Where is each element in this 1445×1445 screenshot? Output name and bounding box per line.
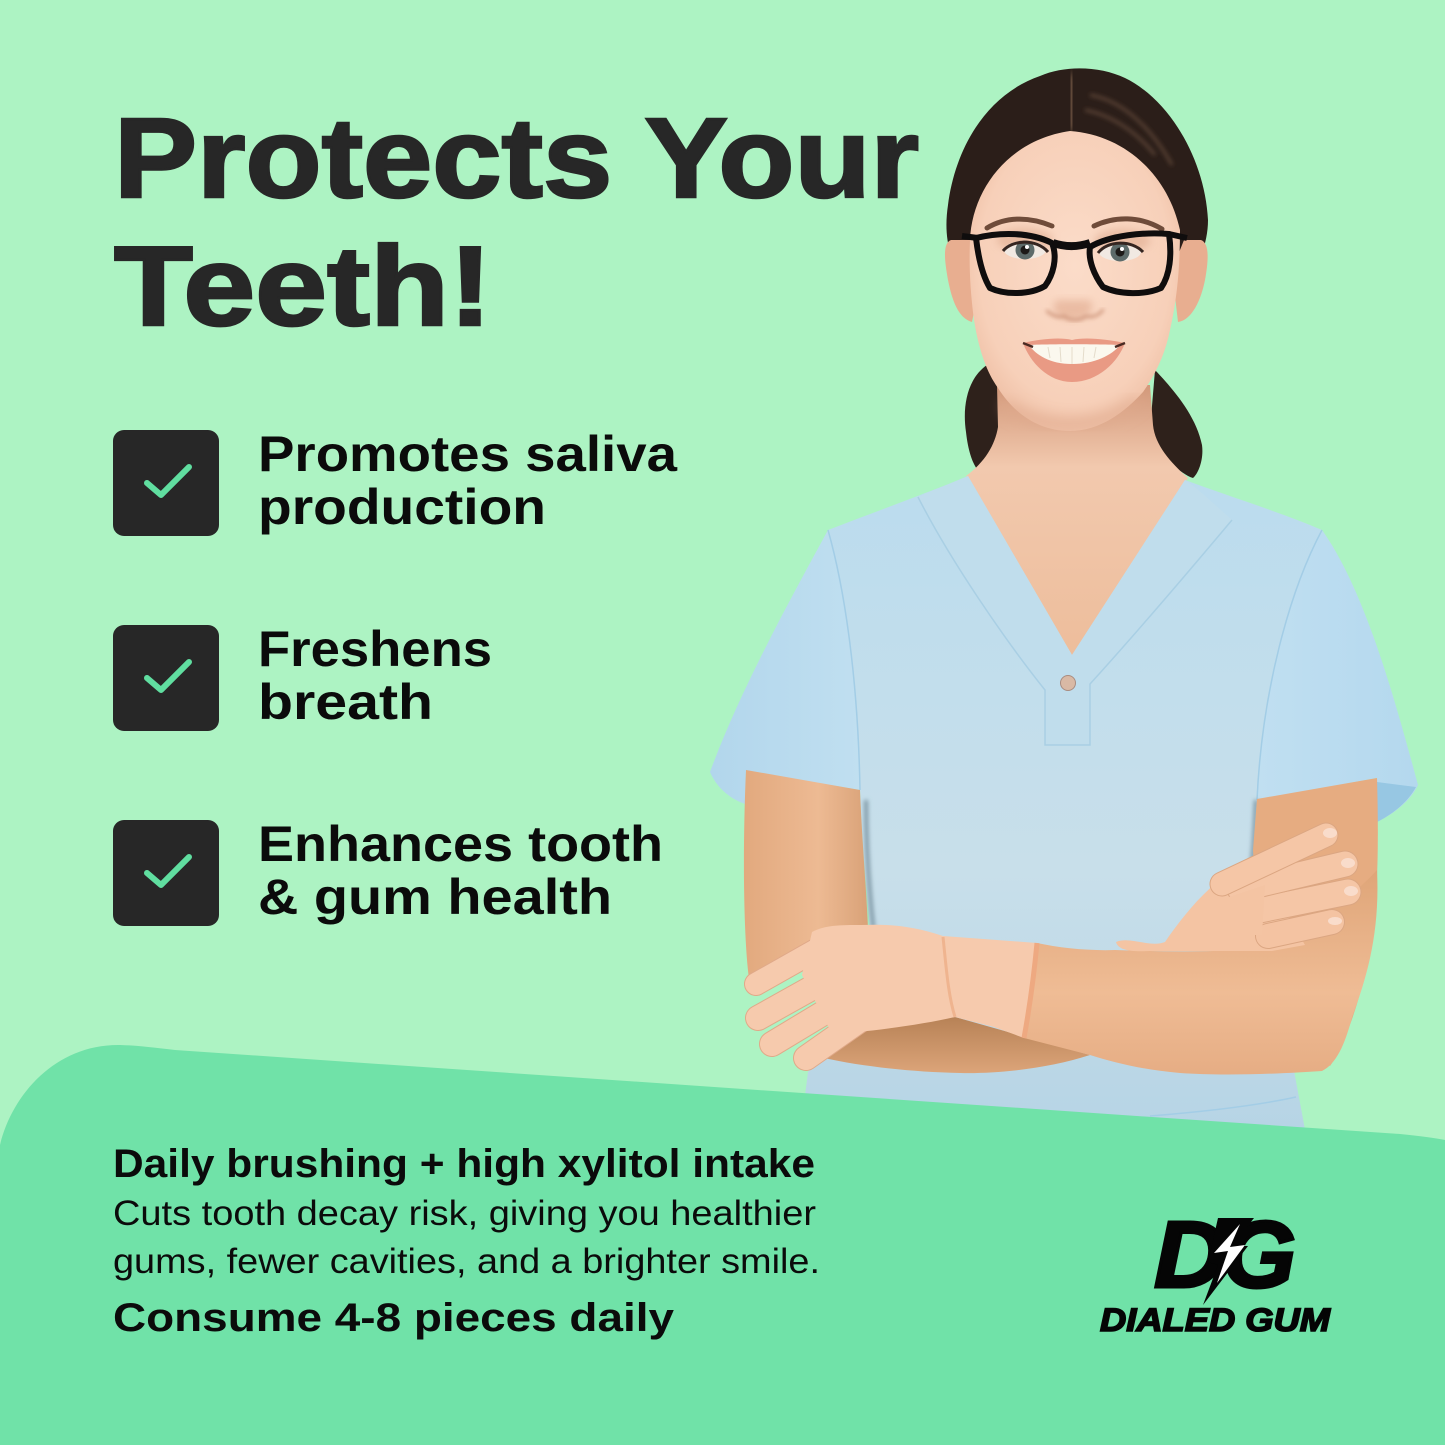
eyes: [1003, 240, 1143, 262]
nose: [1047, 310, 1103, 320]
benefit text: production: [258, 479, 546, 535]
torso shading: [866, 800, 1256, 935]
gloved hand: [756, 925, 1037, 1058]
left upper arm: [744, 770, 868, 985]
benefit text: Promotes saliva: [258, 426, 678, 482]
bottom text block: [113, 1142, 820, 1340]
nose shading: [1054, 300, 1092, 320]
benefit text: [258, 621, 492, 730]
logo: Dialed Gum: D: [1154, 1202, 1226, 1308]
bottom wave panel: [0, 1045, 1445, 1445]
collar and placket: [918, 476, 1232, 745]
check icon: [113, 430, 219, 536]
benefit text: & gum health: [258, 869, 612, 925]
title: [114, 95, 919, 349]
logo: Dialed Gum: G: [1222, 1202, 1296, 1308]
logo: Dialed Gum: [1100, 1202, 1332, 1338]
sleeve hems and seams: [828, 530, 1416, 1116]
benefit: tooth and gum health: [113, 816, 663, 926]
check icon: [113, 820, 219, 926]
eyebrows: [987, 219, 1162, 229]
bottom text block: Consume 4-8 pieces daily: [113, 1296, 675, 1340]
icon: lightning bolt: [1203, 1218, 1254, 1305]
benefit text: Enhances tooth: [258, 816, 663, 872]
right sleeve: [1257, 530, 1418, 823]
bottom text block: gums, fewer cavities, and a brighter smile.: [113, 1242, 820, 1281]
hair highlights: [1085, 95, 1172, 165]
eyeglasses: [962, 233, 1187, 293]
ponytail hair: [965, 365, 1202, 478]
right hand: [1116, 828, 1358, 951]
title: Teeth!: [114, 223, 492, 349]
eye sockets: [997, 228, 1150, 253]
jaw shadow: [1005, 400, 1138, 424]
title: Protects Your: [114, 95, 919, 221]
right upper arm: [1253, 778, 1378, 1066]
left sleeve: [710, 530, 860, 804]
benefit text: [258, 426, 678, 535]
crossed forearm: [1024, 870, 1377, 1074]
neck: [966, 385, 1188, 658]
torso: [800, 476, 1322, 1135]
photo: smiling dental professional in blue scrubs: [710, 68, 1418, 1135]
ears: [945, 240, 982, 322]
benefit text: Freshens: [258, 621, 492, 677]
benefit: breath: [113, 621, 492, 731]
benefit text: breath: [258, 674, 433, 730]
under forearm: [824, 1017, 1090, 1073]
face: [970, 131, 1180, 431]
check icon: [113, 625, 219, 731]
logo: Dialed Gum: DIALED GUM: [1100, 1302, 1332, 1338]
bottom text block: Daily brushing + high xylitol intake: [113, 1142, 815, 1186]
benefit: saliva: [113, 426, 678, 536]
head: [945, 68, 1208, 431]
smile: [1023, 339, 1125, 382]
bottom text block: Cuts tooth decay risk, giving you healthier: [113, 1194, 816, 1233]
benefit text: [258, 816, 663, 925]
back hair: [946, 68, 1208, 262]
